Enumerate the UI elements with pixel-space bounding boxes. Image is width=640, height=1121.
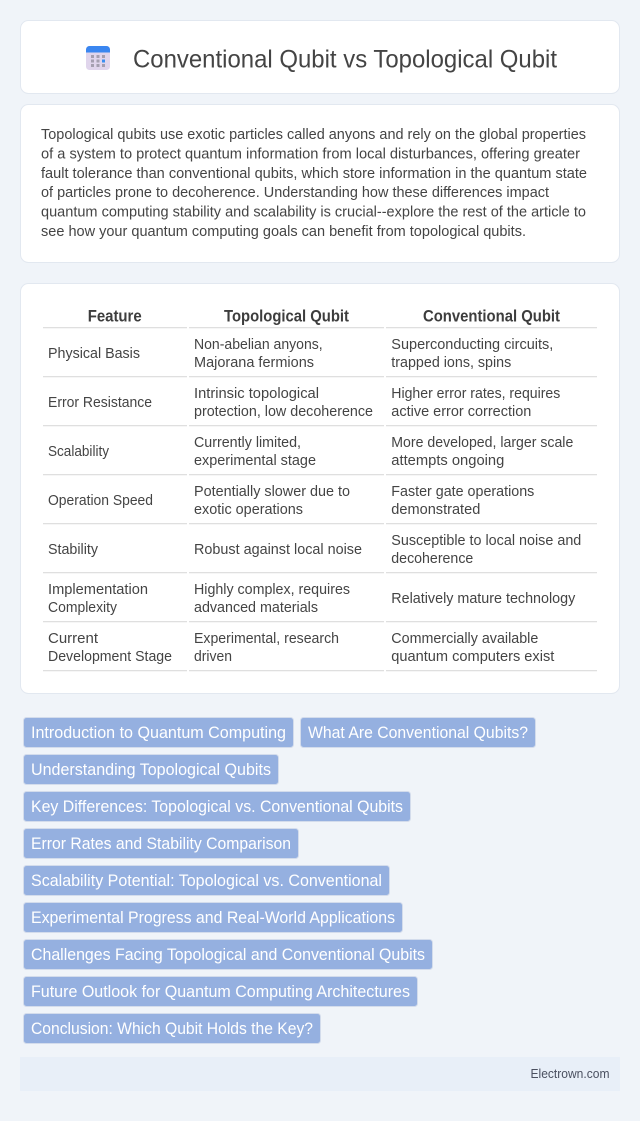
table row: current development stage: Development Stage [48, 649, 172, 665]
panel: comparison table [20, 284, 620, 694]
table row: error resistance: Intrinsic topological [194, 386, 319, 402]
table row: implementation complexity: Complexity [48, 600, 118, 616]
table row: operation speed: exotic operations [194, 502, 303, 518]
table row: physical basis: Majorana fermions [194, 355, 314, 371]
tag: scalability potential: Scalability Potential: Topological vs. Conventional [31, 872, 382, 890]
table row: stability: Robust against local noise [194, 542, 362, 558]
table row: physical basis: trapped ions, spins [391, 355, 511, 371]
table row: implementation complexity: advanced materials [194, 600, 318, 616]
text block: introduction paragraph [41, 127, 587, 240]
table row: error resistance: Error Resistance [48, 395, 152, 411]
tag: conclusion: Conclusion: Which Qubit Holds the Key? [31, 1020, 313, 1038]
table row: stability: decoherence [391, 551, 473, 567]
table row: stability: Susceptible to local noise and [391, 533, 581, 549]
table row: operation speed: Faster gate operations [391, 484, 534, 500]
table row: implementation complexity: Highly complex, requires [194, 582, 350, 598]
table row: physical basis [48, 337, 553, 371]
table row: implementation complexity [48, 582, 576, 616]
table row: implementation complexity: Implementation [48, 582, 148, 598]
text block: introduction paragraph: quantum computing stability and scalability is crucial--explore the rest of the article to [41, 205, 586, 221]
table row: operation speed: Operation Speed [48, 493, 153, 509]
tag: key differences: Key Differences: Topological vs. Conventional Qubits [31, 798, 403, 816]
tag: experimental progress [24, 902, 402, 932]
table row: scalability: attempts ongoing [391, 453, 504, 469]
tag: challenges [24, 940, 432, 970]
table header row: Feature [88, 308, 142, 326]
table row: current development stage [48, 631, 554, 665]
table row: current development stage: driven [194, 649, 232, 665]
table row: stability: Stability [48, 542, 99, 558]
tag: error rates: Error Rates and Stability Comparison [31, 835, 291, 853]
table row: current development stage: Commercially available [391, 631, 538, 647]
tag: conclusion [24, 1014, 320, 1044]
footer: Electrown.com [530, 1067, 610, 1081]
tag: challenges: Challenges Facing Topological and Conventional Qubits [31, 946, 425, 964]
title: Conventional Qubit vs Topological Qubit [133, 46, 557, 74]
table row: implementation complexity: Relatively mature technology [391, 591, 576, 607]
table header row [88, 308, 560, 326]
table row: error resistance [48, 386, 560, 420]
text block: introduction paragraph: of particles prone to decoherence. Understanding how these differences impact [41, 185, 549, 201]
table row: current development stage: Experimental, research [194, 631, 339, 647]
table row: error resistance: active error correction [391, 404, 531, 420]
tag: error rates [24, 828, 298, 858]
table row: scalability: More developed, larger scale [391, 435, 573, 451]
table row: scalability [48, 435, 573, 469]
tag: topological qubits: Understanding Topological Qubits [31, 761, 271, 779]
table row: error resistance: protection, low decoherence [194, 404, 373, 420]
table row: current development stage: Current [48, 631, 98, 647]
table row: operation speed: demonstrated [391, 502, 480, 518]
table header row: Conventional Qubit [423, 308, 560, 326]
tag: scalability potential [24, 866, 390, 896]
tag: introduction [24, 718, 294, 748]
table header row: Topological Qubit [224, 308, 349, 326]
table row: physical basis: Non-abelian anyons, [194, 337, 323, 353]
tag: future outlook [24, 976, 418, 1006]
table row: current development stage: quantum computers exist [391, 649, 554, 665]
tag: future outlook: Future Outlook for Quantum Computing Architectures [31, 983, 410, 1001]
text block: introduction paragraph: fault tolerance than conventional qubits, which store information in the quantum state [41, 166, 587, 182]
text block: introduction paragraph: see how your quantum computing goals can benefit from topological qubits. [41, 224, 526, 240]
table row: scalability: experimental stage [194, 453, 316, 469]
text block: introduction paragraph: Topological qubits use exotic particles called anyons and rely on the global properties [41, 127, 586, 143]
tag: experimental progress: Experimental Progress and Real-World Applications [31, 909, 395, 927]
tag: conventional qubits [300, 718, 536, 748]
tag: introduction: Introduction to Quantum Computing [31, 724, 286, 742]
table row: physical basis: Physical Basis [48, 346, 140, 362]
table row: scalability: Currently limited, [194, 435, 301, 451]
tag: conventional qubits: What Are Conventional Qubits? [308, 724, 528, 742]
panel: header [20, 20, 620, 94]
table row: scalability: Scalability [48, 444, 110, 460]
footer [20, 1057, 620, 1091]
table row: operation speed [48, 484, 534, 518]
table row: physical basis: Superconducting circuits, [391, 337, 553, 353]
icon: calendar [86, 46, 110, 70]
table row: stability [48, 533, 581, 567]
panel: introduction [20, 104, 620, 262]
tag: topological qubits [24, 754, 278, 784]
table row: operation speed: Potentially slower due to [194, 484, 350, 500]
tag: key differences [24, 792, 410, 822]
panel: table of contents tags [24, 718, 536, 1044]
table row: error resistance: Higher error rates, requires [391, 386, 560, 402]
text block: introduction paragraph: of a system to protect quantum information from local disturbances, offering greater [41, 146, 580, 162]
